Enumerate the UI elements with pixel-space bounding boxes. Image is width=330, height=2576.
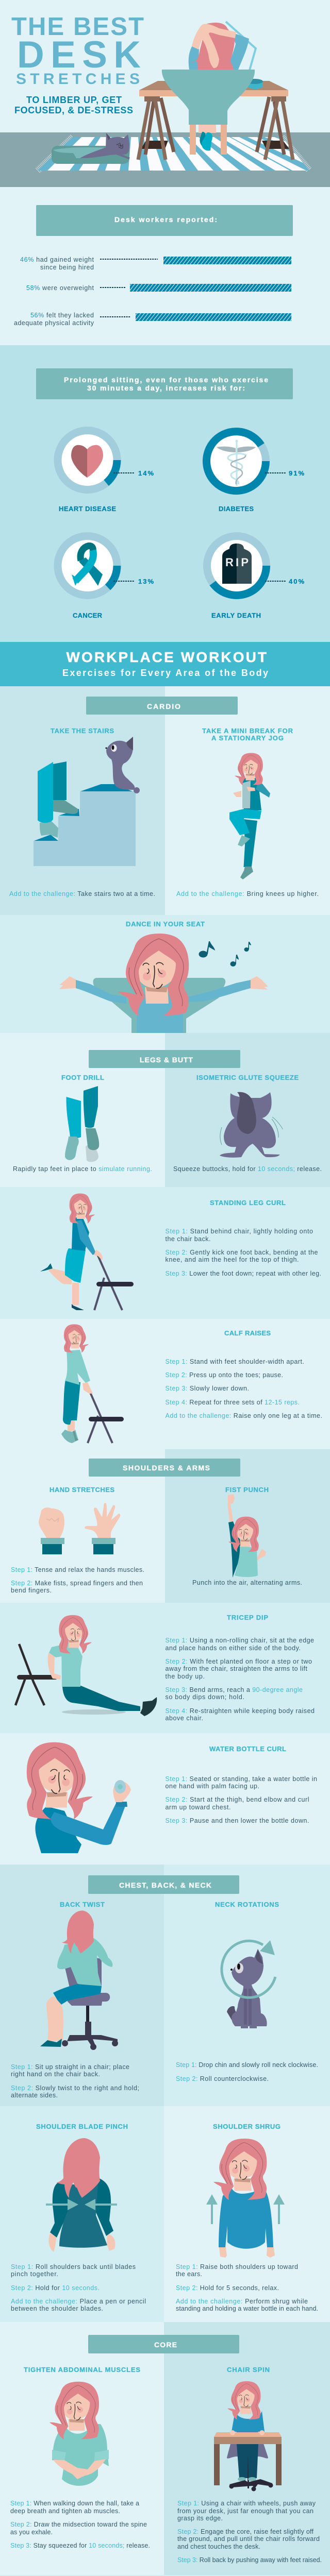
steps: tighten abs: deep breath and tighten ab muscles. xyxy=(10,2507,120,2515)
steps: chair spin: and chest touches the desk. xyxy=(177,2543,260,2550)
risk: heart disease: 14% xyxy=(138,469,154,477)
chair xyxy=(94,1255,134,1310)
stat row: 58 percent: 58% were overweight xyxy=(26,284,94,292)
illustration: cat from behind xyxy=(220,1092,283,1158)
steps: so body dips down; hold. xyxy=(165,1693,244,1701)
banner: workplace workout: Exercises for Every Area of the Body xyxy=(62,668,268,678)
standing leg and shoe xyxy=(72,1283,84,1310)
sweater xyxy=(65,1350,93,1394)
forearms and hands xyxy=(53,2459,106,2479)
steps: chair spin: Step 2: Engage the core, raise feet slightly off xyxy=(177,2528,314,2535)
steps: Step 1: Stand with feet shoulder-width apart. xyxy=(165,1358,304,1365)
steps: shoulder shrug: Add to the challenge: Perform shrug while xyxy=(176,2298,308,2305)
leg xyxy=(46,1996,63,2041)
cat xyxy=(227,1949,267,2028)
cat on stairs xyxy=(105,737,140,793)
steps: back twist: Step 2: Slowly twist to the right and hold; xyxy=(11,2084,139,2092)
heading: WATER BOTTLE CURL xyxy=(209,1745,286,1753)
desk top xyxy=(214,2432,282,2437)
rug xyxy=(38,137,330,171)
top xyxy=(52,2424,109,2486)
risk: diabetes: 91% xyxy=(289,469,304,477)
jacket xyxy=(72,1217,103,1260)
panel: calf raises xyxy=(0,1319,330,1449)
hands xyxy=(59,976,268,990)
steps: Step 2: Start at the thigh, bend elbow and curl xyxy=(165,1796,309,1803)
icon: caduceus xyxy=(217,440,256,486)
steps: chair spin: Step 3: Roll back by pushing away with feet raised. xyxy=(177,2556,322,2564)
arrows inward xyxy=(46,2199,117,2210)
hatched bar xyxy=(163,257,291,264)
risk: heart disease xyxy=(58,431,154,513)
hair xyxy=(56,2138,100,2198)
illustration: tighten abs woman xyxy=(50,2382,109,2486)
panel: chest back and neck xyxy=(0,1865,330,2106)
steps: Step 1: Seated or standing, take a water bottle in xyxy=(165,1775,317,1783)
steps: shoulder blade pinch: Step 2: Hold for 10 seconds. xyxy=(11,2284,100,2292)
sawhorse right xyxy=(257,96,293,160)
head xyxy=(59,1615,92,1654)
steps: Step 1: Using a non-rolling chair, sit at the edge xyxy=(165,1637,314,1644)
head xyxy=(70,1193,95,1224)
sawhorse left xyxy=(138,96,174,160)
steps: shoulder shrug: the ears. xyxy=(176,2270,202,2278)
floor xyxy=(0,132,330,187)
steps: knee, and aim the heel for the top of thigh. xyxy=(165,1256,299,1263)
panel: dance in your seat xyxy=(0,915,330,1033)
top xyxy=(235,1546,258,1577)
panel: core xyxy=(0,2322,330,2575)
panel: sitting risk heading: 30 minutes a day, increases risk for: xyxy=(87,384,245,392)
pants xyxy=(62,1686,140,1711)
illustration: fist punch woman xyxy=(227,1494,266,1578)
icon: music notes xyxy=(199,941,251,967)
heading: shoulder blade pinch: SHOULDER BLADE PINCH xyxy=(36,2123,128,2130)
section tab xyxy=(88,1875,239,1894)
figure: woman stretching behind chair xyxy=(162,23,255,155)
steps: hand stretches: Step 2: Make fists, spread fingers and then xyxy=(11,1580,143,1587)
rotation arrow xyxy=(222,1940,275,1997)
panel: shoulder exercises xyxy=(0,2106,330,2322)
section tab xyxy=(88,2335,239,2353)
risk: early death xyxy=(207,536,304,619)
icon: tombstone: RIP xyxy=(225,556,249,569)
icon: ribbon xyxy=(72,546,103,586)
steps: back twist: alternate sides. xyxy=(11,2092,58,2099)
heading: take the stairs: TAKE THE STAIRS xyxy=(51,727,114,735)
chair xyxy=(15,1644,58,1705)
skirt xyxy=(65,1248,86,1283)
steps: Add to the challenge: Raise only one leg at a time. xyxy=(165,1412,322,1419)
sweater xyxy=(219,2187,273,2249)
steps: tighten abs xyxy=(10,2500,150,2549)
arm xyxy=(51,1802,127,1845)
head xyxy=(235,753,263,785)
illustration: chair spin woman xyxy=(214,2381,282,2492)
heading: CALF RAISES xyxy=(224,1329,271,1337)
steps: shoulder blade pinch xyxy=(11,2263,146,2312)
heading: stationary jog xyxy=(202,727,293,742)
small fist xyxy=(257,1549,266,1561)
risk: early death: EARLY DEATH xyxy=(211,612,261,619)
stat label xyxy=(20,256,94,271)
panel: sitting risks background xyxy=(0,345,330,642)
panel: avoid slouching xyxy=(0,2575,330,2576)
heading: STANDING LEG CURL xyxy=(210,1199,286,1207)
chair xyxy=(93,978,225,1033)
hair xyxy=(62,1910,94,1954)
arrows up xyxy=(206,2194,285,2224)
subtitle line two: FOCUSED, & DE-STRESS xyxy=(14,105,133,115)
chair legs xyxy=(190,124,227,155)
steps: shoulder blade pinch: pinch together. xyxy=(11,2270,58,2278)
risk: diabetes: DIABETES xyxy=(219,505,254,513)
risk: cancer: CANCER xyxy=(73,612,103,619)
subtitle line one: TO LIMBER UP, GET xyxy=(26,95,122,105)
stat row: 56 percent: 56% felt they lacked xyxy=(30,312,94,319)
heading: DANCE IN YOUR SEAT xyxy=(126,920,205,928)
panel: sitting risk heading: Prolonged sitting, even for those who exercise xyxy=(64,376,268,384)
stairs xyxy=(34,791,136,866)
steps: hand stretches xyxy=(11,1566,144,1594)
steps: arm up toward chest. xyxy=(165,1804,231,1811)
skirt xyxy=(53,1984,102,2005)
panel: desk workers heading xyxy=(36,205,293,236)
illustration: stairs with legs and cat xyxy=(34,737,140,866)
stat row: 58 percent xyxy=(26,284,291,292)
panel: tricep dip xyxy=(0,1603,330,1733)
steps: back twist xyxy=(11,2063,139,2099)
hatched bar xyxy=(136,313,291,321)
desk legs xyxy=(214,2444,282,2485)
risk: cancer xyxy=(58,536,154,619)
body xyxy=(35,1806,81,1853)
stat label: 46% had gained weight xyxy=(20,256,94,263)
title: stretches: STRETCHES xyxy=(16,71,140,88)
legs and shoes xyxy=(53,799,78,814)
desk xyxy=(138,81,293,160)
heading: tighten abdominal: TIGHTEN ABDOMINAL MUSCLES xyxy=(24,2366,140,2374)
steps: shoulder shrug: Step 1: Raise both shoulders up toward xyxy=(176,2263,298,2270)
steps: Step 3: Lower the foot down; repeat with other leg. xyxy=(165,1270,321,1277)
steps: the chair back. xyxy=(165,1235,210,1243)
shoe xyxy=(40,2039,62,2047)
section tab: cardio xyxy=(86,697,238,715)
banner: workplace workout: WORKPLACE WORKOUT xyxy=(66,649,267,665)
illustration: tricep dip woman xyxy=(15,1615,157,1716)
shoe xyxy=(140,1697,157,1716)
section tab: legs and butt xyxy=(89,1050,240,1068)
head xyxy=(228,1517,259,1552)
panel: hero background xyxy=(0,0,330,345)
chair back xyxy=(64,1958,102,1988)
steps: away from the chair, straighten the arms to lift xyxy=(165,1665,308,1672)
panel: cardio xyxy=(0,686,330,915)
panel: desk workers heading: Desk workers reported: xyxy=(114,215,217,224)
steps: tighten abs: Step 2: Draw the midsection toward the spine xyxy=(10,2521,147,2528)
steps: Step 4: Re-straighten while keeping body raised xyxy=(165,1707,315,1715)
steps: above chair. xyxy=(165,1715,203,1722)
torso xyxy=(137,994,183,1033)
steps: Step 3: Pause and then lower the bottle down. xyxy=(165,1817,309,1824)
steps: shoulder blade pinch: between the shoulder blades. xyxy=(11,2305,103,2312)
caption: fist punch: Punch into the air, alternating arms. xyxy=(192,1579,302,1586)
chair base xyxy=(229,2479,273,2492)
steps: the body up. xyxy=(165,1673,205,1680)
heading: stationary jog: A STATIONARY JOG xyxy=(211,734,284,742)
steps: chair spin: the ground, and pull until the chair rolls forward xyxy=(177,2535,320,2543)
title: the best: THE BEST xyxy=(11,13,144,41)
hand with bottle xyxy=(113,1780,131,1802)
pants xyxy=(63,1380,80,1425)
steps xyxy=(165,1775,317,1824)
steps: Step 1: Stand behind chair, lightly holding onto xyxy=(165,1228,313,1235)
steps: tighten abs: as you exhale. xyxy=(10,2529,53,2536)
panel: water bottle curl xyxy=(0,1733,330,1865)
sleeve xyxy=(228,1521,242,1578)
heading: back twist: BACK TWIST xyxy=(60,1901,105,1908)
icon: tombstone xyxy=(222,544,252,584)
illustration: woman with chair xyxy=(40,1193,134,1310)
steps: chair spin: grasp its edge. xyxy=(177,2515,223,2522)
illustration: water bottle woman xyxy=(27,1742,131,1853)
steps: Step 3: Slowly lower down. xyxy=(165,1385,249,1392)
cat in bed xyxy=(52,133,130,164)
desk front xyxy=(214,2437,282,2444)
icon: heart xyxy=(71,445,103,478)
panel: sitting risk heading xyxy=(36,368,293,399)
sweater xyxy=(57,1938,112,1987)
illustration: open hand xyxy=(85,1503,120,1554)
illustration: calf raise woman xyxy=(61,1324,124,1443)
steps: Step 2: Press up onto the toes; pause. xyxy=(165,1371,283,1379)
top xyxy=(61,1642,82,1687)
heading: shoulder shrug: SHOULDER SHRUG xyxy=(213,2123,280,2130)
steps: hand stretches: bend fingers. xyxy=(11,1587,52,1594)
head xyxy=(64,1324,89,1353)
steps: shoulder shrug: standing and holding a water bottle in each hand. xyxy=(176,2305,318,2312)
legs xyxy=(68,1419,75,1431)
steps: chair spin xyxy=(177,2500,322,2564)
illustration: shoulder blade pinch xyxy=(46,2138,117,2252)
head xyxy=(50,2382,99,2439)
heading: neck rotations: NECK ROTATIONS xyxy=(215,1901,279,1908)
hands xyxy=(219,2247,275,2258)
head xyxy=(213,2139,267,2200)
steps xyxy=(165,1228,321,1277)
bowl xyxy=(246,79,263,89)
steps: tighten abs: Step 1: When walking down the hall, take a xyxy=(10,2500,139,2507)
banner: workplace workout xyxy=(0,642,330,686)
risk: diabetes xyxy=(206,432,304,513)
illustration: back twist woman xyxy=(40,1910,118,2050)
illustration: fist xyxy=(39,1507,64,1554)
shadow xyxy=(62,1709,126,1715)
caption: stairs challenge: Add to the challenge: Take stairs two at a time. xyxy=(9,890,155,897)
chair xyxy=(88,1393,124,1443)
arms xyxy=(76,980,251,1004)
heading: TRICEP DIP xyxy=(227,1614,268,1621)
steps: Step 2: With feet planted on floor a step or two xyxy=(165,1658,312,1665)
steps: shoulder blade pinch: Step 1: Roll shoulders back until blades xyxy=(11,2263,136,2270)
steps: hand stretches: Step 1: Tense and relax the hands muscles. xyxy=(11,1566,144,1573)
heading: glute squeeze: ISOMETRIC GLUTE SQUEEZE xyxy=(196,1074,299,1081)
illustration: shoulder shrug xyxy=(206,2139,285,2258)
heading: foot drill: FOOT DRILL xyxy=(61,1074,104,1081)
arm xyxy=(48,1653,61,1680)
steps: back twist: Step 1: Sit up straight in a chair; place xyxy=(11,2063,129,2071)
title block xyxy=(11,13,144,115)
sweater back xyxy=(59,2184,107,2248)
caption: foot drill: Rapidly tap feet in place to simulate running. xyxy=(13,1165,152,1173)
illustration: dancing woman xyxy=(59,934,268,1033)
risk: early death: 40% xyxy=(289,578,304,585)
panel: shoulders and arms xyxy=(0,1449,330,1603)
raised arm xyxy=(227,1494,235,1524)
shoes xyxy=(238,2477,256,2481)
sleeve xyxy=(49,1645,62,1657)
heading: stationary jog: TAKE A MINI BREAK FOR xyxy=(202,727,293,735)
steps: neck rotations: Step 2: Roll counterclockwise. xyxy=(176,2075,269,2082)
steps: tighten abs: Step 3: Stay squeezed for 10 seconds; release. xyxy=(10,2542,150,2549)
panel: legs and butt xyxy=(0,1033,330,1187)
panel: standing leg curl xyxy=(0,1187,330,1319)
stat row: 56 percent xyxy=(14,312,291,327)
steps: and place hands on either side of the body. xyxy=(165,1645,301,1652)
steps: chair spin: from your desk, just far enough that you can xyxy=(177,2507,314,2515)
section tab: CHEST, BACK, & NECK xyxy=(119,1881,211,1889)
steps xyxy=(165,1358,322,1419)
stat label: since being hired xyxy=(40,264,94,271)
section tab: SHOULDERS & ARMS xyxy=(123,1464,210,1472)
stat row: 46 percent xyxy=(20,256,291,271)
steps: chair spin: Step 1: Using a chair with wheels, push away xyxy=(177,2500,316,2507)
head xyxy=(27,1742,93,1819)
chair xyxy=(227,2421,268,2488)
steps: shoulder shrug xyxy=(176,2263,318,2312)
steps: Step 3: Bend arms, reach a 90-degree angle xyxy=(165,1686,303,1693)
title: desk: DESK xyxy=(17,34,141,76)
steps: shoulder shrug: Step 2: Hold for 5 seconds, relax. xyxy=(176,2284,279,2292)
heading: chair spin: CHAIR SPIN xyxy=(227,2366,270,2374)
head xyxy=(227,2381,261,2420)
steps: Step 2: Gently kick one foot back, bending at the xyxy=(165,1249,318,1256)
arms xyxy=(192,24,236,68)
heading: hand stretches: HAND STRETCHES xyxy=(50,1486,114,1494)
steps: back twist: right hand on the chair back. xyxy=(11,2071,100,2078)
rolled sleeves xyxy=(52,2450,109,2461)
steps: one hand with palm facing up. xyxy=(165,1783,259,1790)
risk: cancer: 13% xyxy=(138,578,154,585)
steps xyxy=(165,1637,315,1722)
steps: neck rotations xyxy=(176,2061,318,2082)
steps: Step 4: Repeat for three sets of 12-15 reps. xyxy=(165,1399,300,1406)
section tab: legs and butt: LEGS & BUTT xyxy=(140,1056,193,1064)
pants xyxy=(237,2444,258,2478)
sweater xyxy=(232,2411,265,2432)
section tab: CORE xyxy=(154,2341,177,2349)
illustration: cat with rotation arrow xyxy=(222,1940,275,2028)
heading: fist punch: FIST PUNCH xyxy=(225,1486,269,1494)
raised leg and shoe xyxy=(40,1263,72,1284)
shoes xyxy=(61,1430,78,1443)
section tab xyxy=(89,1459,240,1477)
caption: glute squeeze: Squeeze buttocks, hold for 10 seconds; release. xyxy=(173,1165,322,1173)
steps: shoulder blade pinch: Add to the challenge: Place a pen or pencil xyxy=(11,2298,146,2305)
steps: neck rotations: Step 1: Drop chin and slowly roll neck clockwise. xyxy=(176,2061,318,2069)
head xyxy=(118,934,189,1016)
desk lamp xyxy=(226,22,256,70)
hair xyxy=(191,23,235,70)
sleeves xyxy=(189,32,249,70)
legs and feet xyxy=(199,124,216,150)
risk: heart disease: HEART DISEASE xyxy=(59,505,116,513)
section tab: cardio: CARDIO xyxy=(147,702,180,710)
illustration: tapping feet xyxy=(65,1086,99,1162)
hatched bar xyxy=(130,284,291,292)
sweater arms xyxy=(50,2178,113,2238)
chair base xyxy=(62,1993,118,2050)
illustration: jogger xyxy=(229,753,270,879)
hands xyxy=(230,2430,265,2435)
caption: jog challenge: Add to the challenge: Bring knees up higher. xyxy=(176,890,319,897)
chair back shell xyxy=(162,70,255,125)
hands xyxy=(48,2233,115,2252)
stat row: 56 percent: adequate physical activity xyxy=(14,319,94,327)
